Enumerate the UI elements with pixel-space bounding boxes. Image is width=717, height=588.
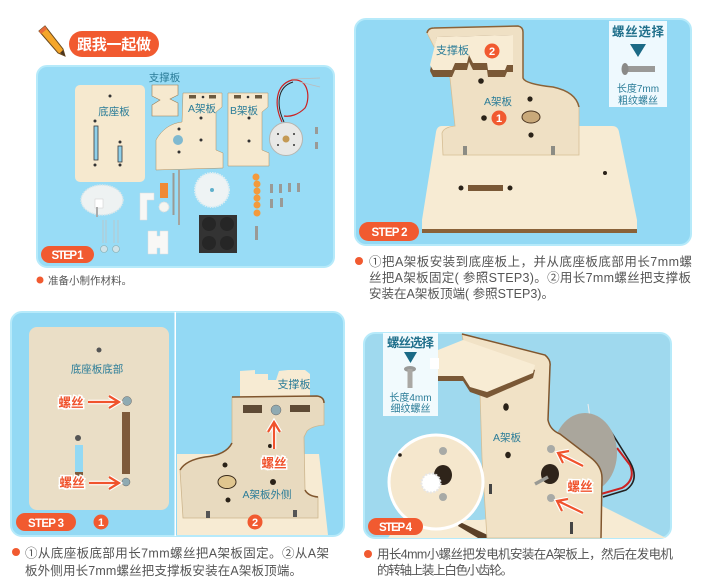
base board [388, 505, 666, 538]
part: A frame: A架板 [188, 102, 216, 115]
photo: A frame outside [177, 370, 328, 535]
callout: lower screw [59, 475, 119, 490]
A frame [427, 26, 579, 155]
marker 1 [94, 514, 108, 530]
caption: step 3: ①从底座板底部用长7mm螺丝把A架板固定。②从A架 [25, 546, 329, 560]
heading pill: 跟我一起做 [77, 36, 151, 54]
part: screws [255, 127, 318, 240]
step 1 badge [41, 246, 94, 263]
support plate: 支撑板 [436, 43, 469, 57]
marker 2 [248, 514, 262, 530]
step 4 badge: STEP 4 [379, 522, 413, 534]
step 3 badge: STEP 3 [28, 518, 64, 530]
photo: A frame outside: 支撑板 [278, 377, 310, 391]
part: orange washers [252, 174, 260, 216]
part: B frame: B架板 [230, 104, 258, 117]
part: support plate: 支撑板 [149, 71, 181, 84]
part: B frame [228, 93, 269, 166]
A frame: A架板 [484, 95, 512, 108]
part: A frame [156, 93, 223, 170]
A frame: A架板 [493, 431, 521, 444]
step 1 badge: STEP 1 [52, 250, 84, 262]
divider [174, 312, 176, 536]
support plate [430, 35, 513, 77]
part: rods and small gears [140, 170, 180, 225]
marker 1 [492, 110, 506, 126]
support plate [438, 340, 535, 398]
callout: screws [557, 451, 593, 513]
screw selection box [383, 333, 438, 416]
screw selection box: 粗纹螺丝 [618, 94, 658, 107]
part: white connector [148, 231, 168, 254]
callout: top screw: 螺丝 [261, 456, 287, 470]
screw selection box: 长度7mm [617, 82, 659, 95]
part: black pad [199, 215, 237, 253]
screw selection box: 细纹螺丝 [390, 402, 430, 415]
heading: follow along [39, 26, 159, 57]
caption: step 2: 丝把A架板固定( 参照STEP3)。②用长7mm螺丝把支撑板 [369, 270, 691, 285]
screw selection box: 螺丝选择 [612, 24, 664, 39]
marker 2: 2 [252, 517, 258, 529]
photo: base underside: 底座板底部 [71, 362, 123, 376]
callout: upper screw: 螺丝 [58, 395, 84, 410]
callout: screws: 螺丝 [567, 479, 593, 494]
icon: pencil [39, 26, 65, 56]
panel: step 4 motor mount [364, 333, 671, 538]
marker 2: 2 [489, 46, 495, 58]
white gear piece [430, 358, 439, 369]
caption: step 4: 的转轴上装上白色小齿轮。 [377, 562, 513, 578]
part: motor with wires [270, 78, 320, 156]
caption: step 2: ①把A架板安装到底座板上，并从底座板底部用长7mm螺 [369, 254, 692, 269]
screw selection box: 螺丝选择 [387, 335, 434, 350]
panel: step 3 fastening [11, 312, 344, 536]
panel: step 2 assembly [355, 19, 691, 245]
slot in base [458, 522, 494, 538]
part: base board [75, 85, 145, 182]
marker 2 [484, 44, 500, 58]
part: LEDs [100, 220, 120, 252]
step 3 badge [16, 513, 76, 531]
photo: A frame outside: A架板外侧 [242, 488, 292, 501]
callout: upper screw [58, 395, 119, 410]
panel: step 1 materials [37, 66, 334, 267]
part: base board: 底座板 [98, 105, 130, 118]
base board [422, 126, 637, 233]
caption: step 4: 用长4mm小螺丝把发电机安装在A架板上，然后在发电机 [377, 546, 673, 562]
screw selection box [609, 21, 667, 107]
part: support plate [149, 71, 181, 116]
marker 1: 1 [98, 517, 104, 529]
photo: base underside [29, 327, 169, 510]
screw selection box: 长度4mm [389, 391, 432, 404]
callout: top screw [261, 422, 287, 470]
A frame [462, 334, 602, 538]
step 4 badge [368, 518, 423, 535]
caption: step 3: 板外侧用长7mm螺丝把支撑板安装在A架板顶端。 [25, 563, 302, 578]
motor [553, 404, 634, 497]
marker 1: 1 [496, 113, 502, 125]
caption: step 2: 安装在A架板顶端( 参照STEP3)。 [369, 286, 554, 301]
caption: step 3 [12, 546, 329, 578]
caption: step 2 [355, 254, 692, 301]
callout: lower screw: 螺丝 [59, 475, 85, 490]
icon: coarse screw [622, 63, 655, 75]
inset: gear close-up [389, 435, 483, 529]
part: large gear [195, 173, 229, 207]
caption: step 4 [364, 546, 673, 578]
step 2 badge: STEP 2 [372, 227, 408, 239]
step 2 badge [359, 222, 419, 241]
part: gear assembly [81, 185, 123, 217]
caption: step 1: 准备小制作材料。 [48, 274, 132, 287]
icon: fine screw [404, 366, 416, 388]
